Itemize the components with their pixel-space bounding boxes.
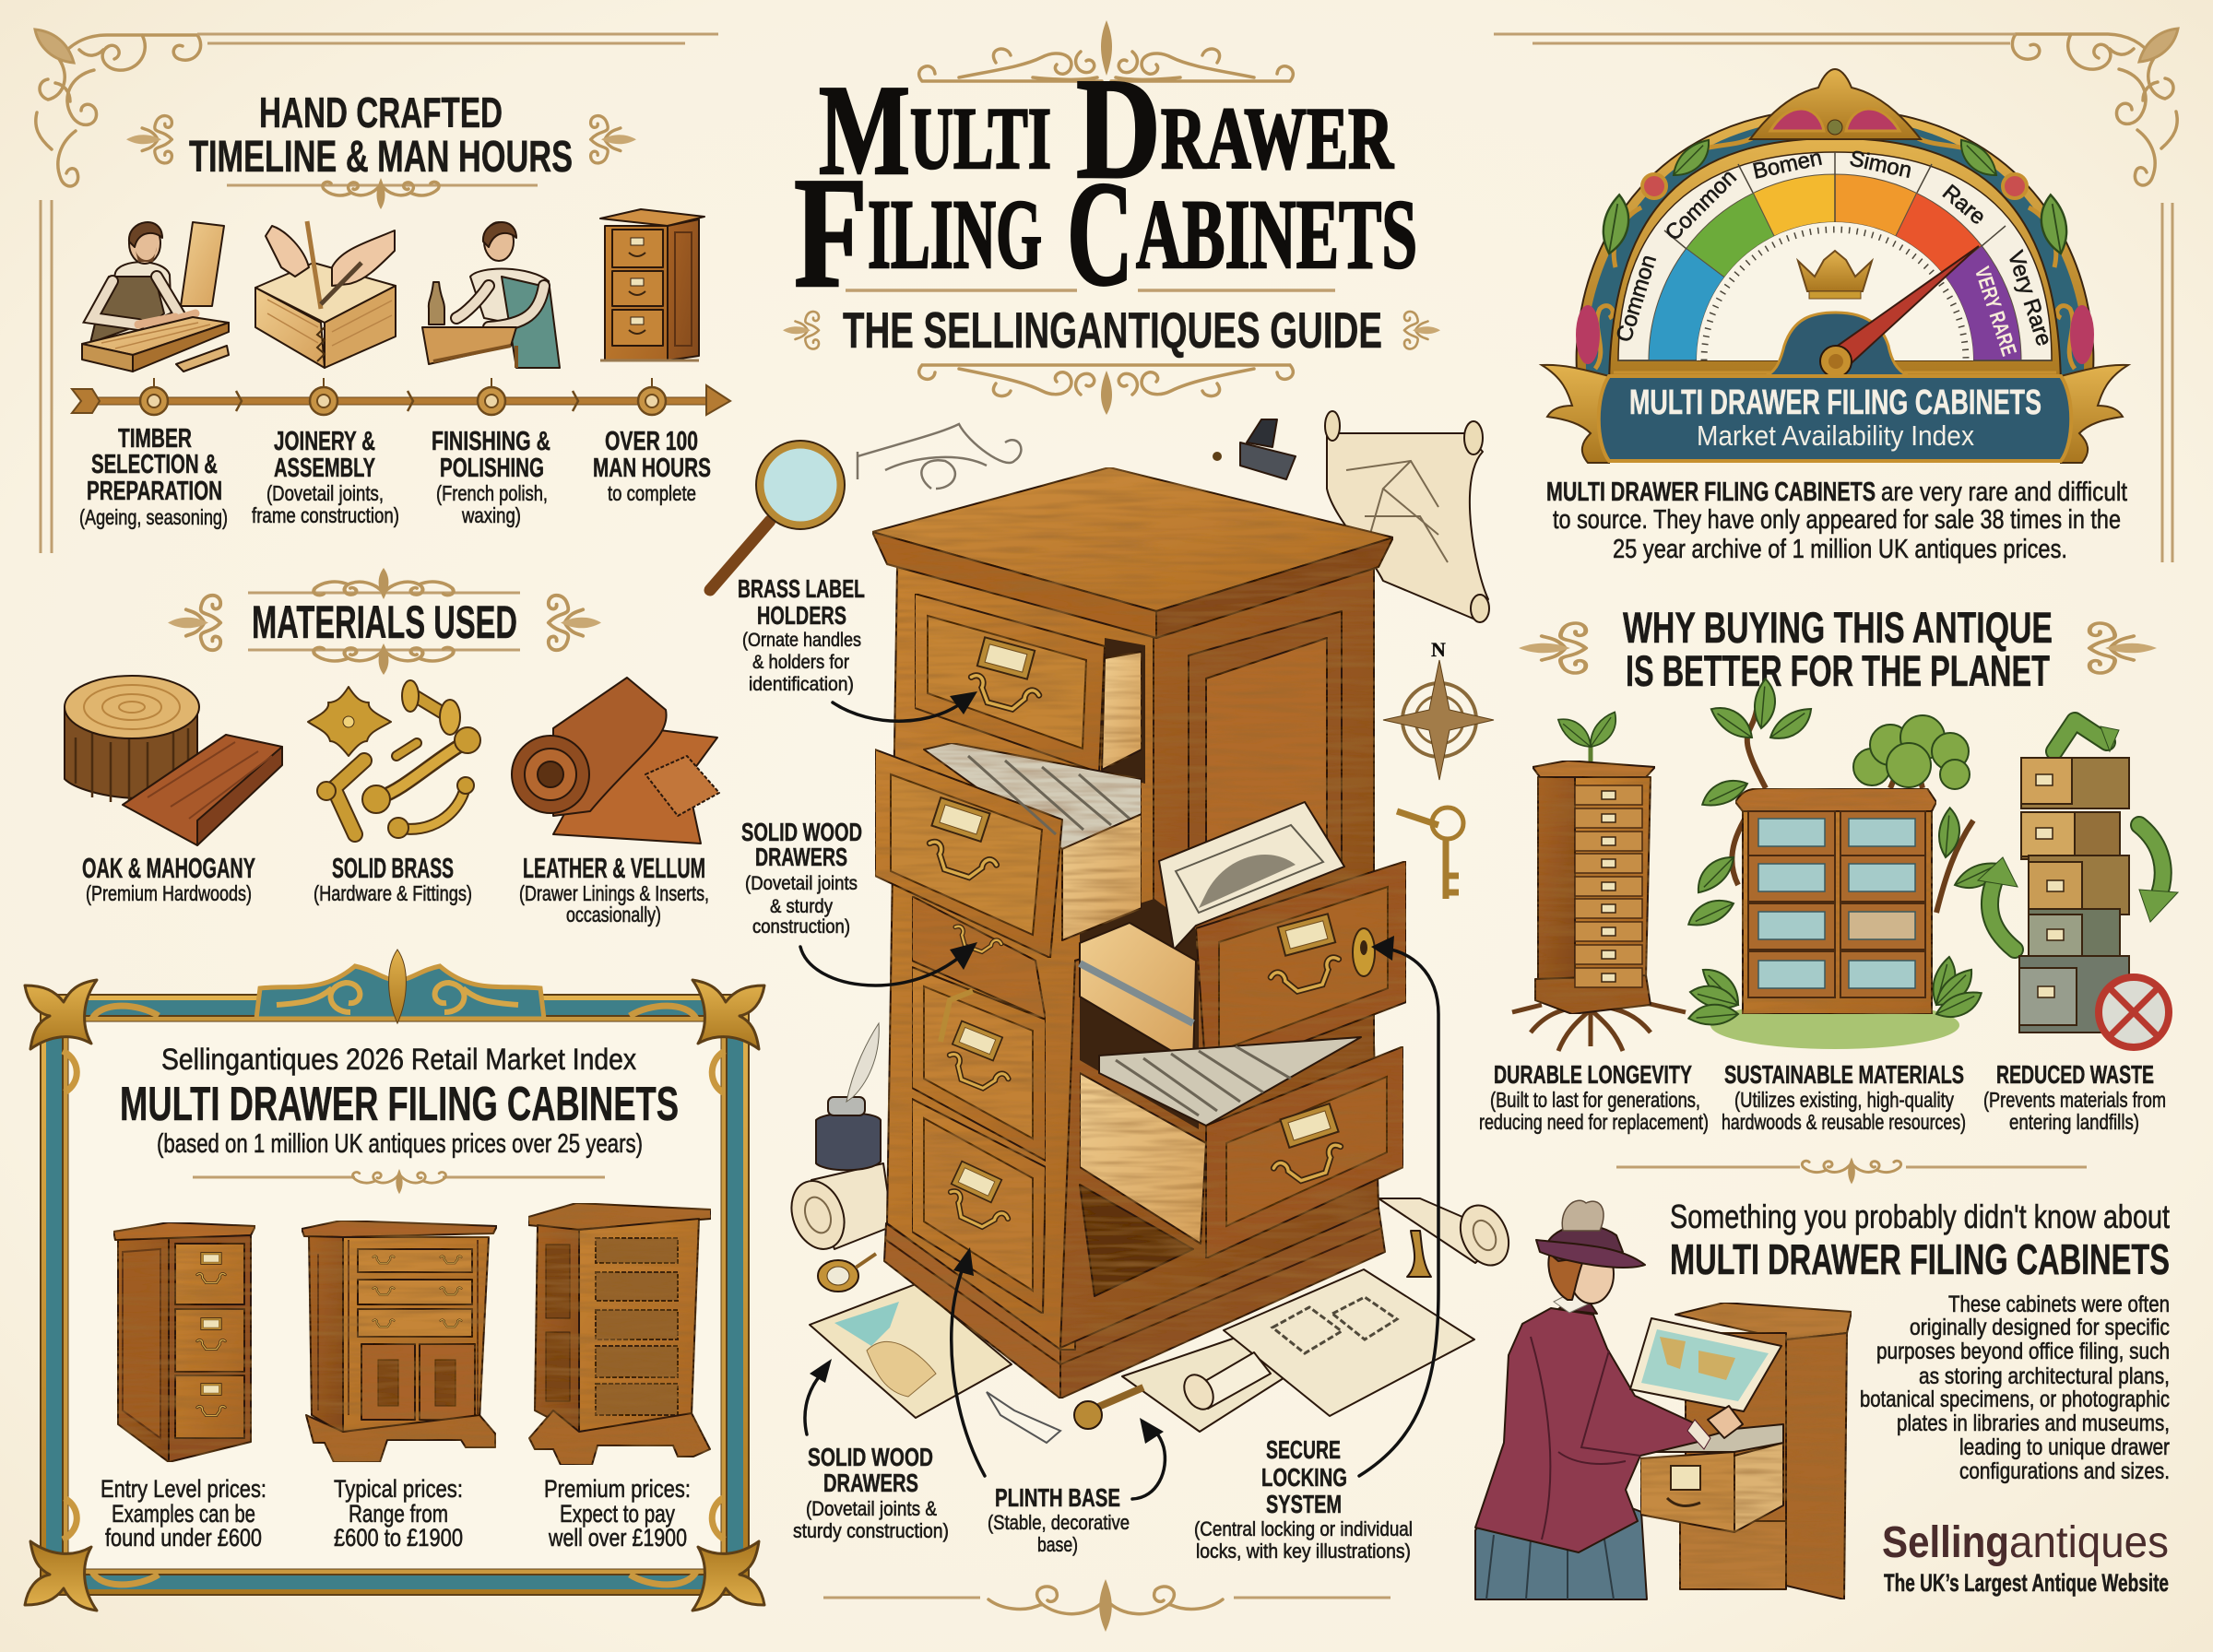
file tabs [968, 756, 1130, 834]
price caption: typical: £600 to £1900 [334, 1524, 463, 1552]
gauge scale labels: Common [1612, 252, 1662, 345]
arrow: solid wood drawers upper [800, 942, 977, 985]
benefit label: durable longevity: reducing need for replacement) [1479, 1110, 1709, 1134]
benefit label: sustainable materials: SUSTAINABLE MATERIALS [1724, 1060, 1964, 1089]
step label: timber: (Ageing, seasoning) [79, 505, 228, 529]
decorative quill swirl [858, 424, 1021, 489]
gauge scale labels: Rare [1937, 180, 1990, 230]
benefit label: durable longevity: (Built to last for generations, [1490, 1088, 1700, 1112]
heading ornaments [168, 568, 601, 675]
heading: planet: WHY BUYING THIS ANTIQUE [1623, 603, 2053, 652]
callout: solid wood drawers lower [793, 1443, 949, 1542]
illustration: woman with cabinet [1475, 1200, 1852, 1599]
icon: inkwell and quill [816, 1023, 881, 1170]
material label: oak and mahogany: OAK & MAHOGANY [82, 852, 255, 884]
benefit label: reduced waste [1983, 1060, 2166, 1134]
gauge scale labels: Bomen [1750, 146, 1824, 184]
illustration: timber selection [82, 222, 229, 372]
price caption: typical: Range from [349, 1500, 448, 1528]
material label: leather and vellum: occasionally) [566, 903, 661, 926]
step label: timber: TIMBER [118, 424, 192, 454]
step label: timber: PREPARATION [87, 477, 222, 506]
material label: solid brass: (Hardware & Fittings) [314, 881, 472, 905]
panel: did you know [1475, 1198, 2170, 1599]
callout: solid wood drawers lower: (Dovetail joints & [806, 1497, 937, 1520]
step label: joinery: JOINERY & [274, 427, 375, 456]
callout: plinth base [988, 1483, 1130, 1556]
heading: hand crafted timeline [189, 88, 573, 182]
cabinet: premium [528, 1203, 711, 1465]
step label: joinery: ASSEMBLY [274, 454, 375, 483]
heading ornaments [126, 116, 636, 209]
main title: ULTI [910, 89, 1051, 187]
cabinet: entry level [113, 1222, 255, 1462]
arrow: brass label holders [833, 691, 977, 721]
arrow: plinth left [952, 1247, 985, 1476]
main title: ILING [868, 181, 1042, 289]
benefit label: sustainable materials: (Utilizes existing, high-quality [1734, 1088, 1954, 1112]
icon: brass hardware [308, 680, 480, 838]
bottom centre ornament [823, 1579, 1391, 1632]
fact body: originally designed for specific [1910, 1315, 2170, 1340]
brass label holders and handles [924, 637, 1346, 1235]
fact body: as storing architectural plans, [1919, 1363, 2170, 1389]
index note: (based on 1 million UK antiques prices over 25 years) [157, 1129, 643, 1159]
step label: man hours: MAN HOURS [593, 454, 711, 483]
subtitle: THE SELLINGANTIQUES GUIDE [843, 301, 1382, 359]
gauge scale labels [1612, 146, 2056, 359]
rarity colour bands [1649, 174, 2021, 360]
step label: man hours: OVER 100 [605, 427, 698, 456]
logo: sellingantiques: Selling [1882, 1518, 2009, 1567]
panel: market availability gauge [1542, 69, 2128, 564]
price caption: premium: Premium prices: [544, 1475, 691, 1503]
price caption: entry level [101, 1475, 266, 1552]
callout: plinth base: (Stable, decorative [988, 1511, 1130, 1534]
step label: joinery: frame construction) [252, 503, 399, 527]
lower crest ornament [919, 365, 1293, 415]
callout: solid wood drawers upper: SOLID WOOD [741, 818, 862, 846]
benefit label: sustainable materials: hardwoods & reusable resources) [1722, 1110, 1966, 1134]
heading: hand crafted timeline: TIMELINE & MAN HOURS [189, 133, 573, 182]
illustration: sustainable materials [1686, 678, 2003, 1049]
heading: hand crafted timeline: HAND CRAFTED [259, 88, 503, 136]
icon: brass key [1397, 808, 1463, 899]
step label: timber [79, 424, 228, 529]
step label: man hours: to complete [608, 481, 696, 505]
drawer: left one [915, 594, 1142, 773]
drawer: right open with map [1080, 802, 1406, 1079]
price caption: premium [544, 1475, 691, 1552]
step label: joinery: (Dovetail joints, [266, 481, 384, 505]
gauge dial [1618, 152, 2052, 360]
callout: secure locking system: SYSTEM [1266, 1490, 1342, 1518]
material label: oak and mahogany [82, 852, 255, 905]
price caption: entry level: Entry Level prices: [101, 1475, 266, 1503]
material label: solid brass [314, 852, 472, 905]
icon: compass rose [1383, 638, 1494, 780]
fact body [1860, 1292, 2170, 1484]
material label: leather and vellum: LEATHER & VELLUM [523, 852, 705, 884]
price caption: entry level: found under £600 [105, 1524, 262, 1552]
gauge needle [1820, 246, 1979, 377]
callout: plinth base: PLINTH BASE [995, 1483, 1120, 1512]
drawer: left two with files [875, 743, 1142, 958]
gauge scale labels: Simon [1847, 146, 1914, 183]
price caption: premium: well over £1900 [548, 1524, 687, 1552]
callout: brass label holders: HOLDERS [757, 601, 846, 630]
top crest ornament [919, 20, 1293, 81]
benefit label: sustainable materials [1722, 1060, 1966, 1134]
callout: secure locking system: (Central locking or individual [1194, 1517, 1413, 1540]
dark drawer recesses [1080, 638, 1199, 1129]
main title: ABINETS [1136, 181, 1417, 289]
arrow: plinth base [1132, 1418, 1165, 1499]
material label: solid brass: SOLID BRASS [332, 852, 454, 884]
price caption: premium: Expect to pay [560, 1500, 675, 1528]
callout arrows [800, 691, 1438, 1499]
gauge scale labels: Very Rare [2003, 248, 2056, 349]
icon: floor papers [1122, 1269, 1474, 1432]
icon: leather roll [512, 678, 719, 844]
step label: timber: SELECTION & [91, 450, 218, 479]
illustration: finishing [422, 222, 560, 368]
icon: magnifying glass [710, 441, 845, 590]
drawers: lower left [912, 896, 1046, 1314]
ornate frame [25, 950, 764, 1611]
callout: solid wood drawers lower: SOLID WOOD [808, 1443, 933, 1471]
title rule [846, 289, 1335, 292]
illustration: durable longevity [1512, 710, 1686, 1051]
callout: solid wood drawers upper: & sturdy [770, 896, 833, 917]
rarity description: 25 year archive of 1 million UK antiques prices. [1613, 535, 2067, 564]
panel: better for the planet [1479, 603, 2178, 1184]
top-right corner border [1494, 29, 2178, 562]
icon: map scroll [1325, 411, 1489, 622]
icon: right scroll [1379, 1198, 1518, 1273]
cabinet: typical [302, 1221, 497, 1462]
logo: sellingantiques: antiques [2009, 1518, 2169, 1567]
banner subtitle: Market Availability Index [1697, 419, 1974, 452]
gauge scale labels: VERY RARE [1970, 264, 2021, 359]
benefit label: durable longevity [1479, 1060, 1709, 1134]
icon: oak log and plank [65, 676, 282, 845]
material label: leather and vellum [519, 852, 709, 926]
gauge scale labels: Common [1661, 165, 1742, 246]
central filing cabinet [872, 467, 1406, 1398]
fact body: These cabinets were often [1948, 1292, 2170, 1317]
callout: secure locking system: locks, with key illustrations) [1196, 1540, 1411, 1563]
main title [794, 48, 1417, 321]
step label: finishing: POLISHING [440, 454, 544, 483]
benefit label: reduced waste: entering landfills) [2009, 1110, 2139, 1134]
main title: RAWER [1161, 89, 1394, 187]
icon: floor map [810, 1284, 1012, 1418]
callout: brass label holders: (Ornate handles [742, 630, 861, 651]
callout: secure locking system [1194, 1435, 1413, 1563]
panel: materials used [65, 568, 719, 926]
callout: secure locking system: LOCKING [1261, 1463, 1347, 1492]
illustration: joinery [255, 221, 396, 368]
step label: finishing [432, 427, 550, 527]
top-left corner border [35, 30, 718, 553]
icon: crown [1798, 251, 1872, 299]
benefit label: durable longevity: DURABLE LONGEVITY [1494, 1060, 1692, 1089]
main title: C [1067, 151, 1133, 317]
price caption: typical [334, 1475, 463, 1552]
rarity description [1546, 478, 2127, 564]
rarity description: MULTI DRAWER FILING CABINETS [1546, 478, 1876, 507]
icon: left scroll [783, 1163, 893, 1257]
cabinet body [872, 467, 1393, 1398]
illustration: reduced waste [1978, 721, 2178, 1047]
panel: retail market index [25, 950, 764, 1611]
arrow: secure locking [1359, 936, 1438, 1476]
icon: ink bottle [1213, 419, 1296, 479]
fact heading [1670, 1198, 2170, 1283]
icon: compass rose: N [1431, 638, 1446, 661]
step label: finishing: waxing) [461, 503, 521, 527]
callout: brass label holders [738, 574, 865, 695]
banner title: MULTI DRAWER FILING CABINETS [1629, 384, 2041, 422]
title block [783, 20, 1440, 415]
timeline arrow [72, 378, 730, 415]
rarity description: are very rare and difficult [1881, 478, 2127, 507]
fact body: configurations and sizes. [1959, 1458, 2170, 1484]
heading: planet [1623, 603, 2053, 695]
callout: secure locking system: SECURE [1266, 1435, 1341, 1464]
divider ornament [193, 1169, 605, 1194]
arrow: solid wood lower [805, 1359, 832, 1434]
gauge banner [1542, 365, 2128, 463]
main title: F [794, 146, 868, 321]
step label: joinery [252, 427, 399, 527]
drawer: right lower with files [1080, 1037, 1403, 1258]
icon: small brass tools [818, 1231, 1431, 1443]
secure lock plate [1353, 928, 1375, 976]
illustration: finished cabinet [600, 209, 704, 360]
gauge crest [1750, 69, 1921, 139]
benefit label: reduced waste: (Prevents materials from [1983, 1088, 2166, 1112]
material label: leather and vellum: (Drawer Linings & Inserts, [519, 881, 709, 905]
callout: brass label holders: identification) [749, 674, 854, 695]
scene: floor items behind cabinet [783, 1163, 1518, 1443]
callout: brass label holders: & holders for [752, 652, 849, 673]
logo: sellingantiques [1882, 1518, 2169, 1567]
price caption: typical: Typical prices: [334, 1475, 463, 1503]
callout: solid wood drawers lower: sturdy construction) [793, 1519, 949, 1542]
callout: solid wood drawers upper [741, 818, 862, 938]
main title: D [1076, 48, 1161, 208]
step label: finishing: FINISHING & [432, 427, 550, 456]
callout: solid wood drawers upper: DRAWERS [755, 843, 847, 871]
heading: materials used: MATERIALS USED [252, 596, 517, 648]
section divider ornament [1616, 1158, 2087, 1184]
heading ornaments [1519, 623, 2157, 673]
fact body: leading to unique drawer [1959, 1434, 2170, 1460]
cabinet hardware: typical [373, 1257, 461, 1327]
gauge arch [1576, 109, 2094, 392]
step label: man hours [593, 427, 711, 505]
step label: finishing: (French polish, [436, 481, 548, 505]
panel: hand crafted timeline [72, 88, 730, 529]
index subtitle: Sellingantiques 2026 Retail Market Index [161, 1043, 636, 1076]
price caption: entry level: Examples can be [112, 1500, 255, 1528]
material label: oak and mahogany: (Premium Hardwoods) [86, 881, 252, 905]
callout: solid wood drawers upper: (Dovetail joints [745, 873, 858, 894]
callout: brass label holders: BRASS LABEL [738, 574, 865, 603]
callout: solid wood drawers upper: construction) [752, 916, 850, 938]
callout: plinth base: base) [1037, 1533, 1078, 1556]
callout: solid wood drawers lower: DRAWERS [823, 1469, 918, 1497]
main title: M [819, 59, 910, 202]
subtitle ornaments [783, 312, 1440, 349]
cabinet hardware: entry level [197, 1253, 225, 1416]
gauge dome [1761, 313, 1913, 378]
index title: MULTI DRAWER FILING CABINETS [120, 1078, 679, 1131]
